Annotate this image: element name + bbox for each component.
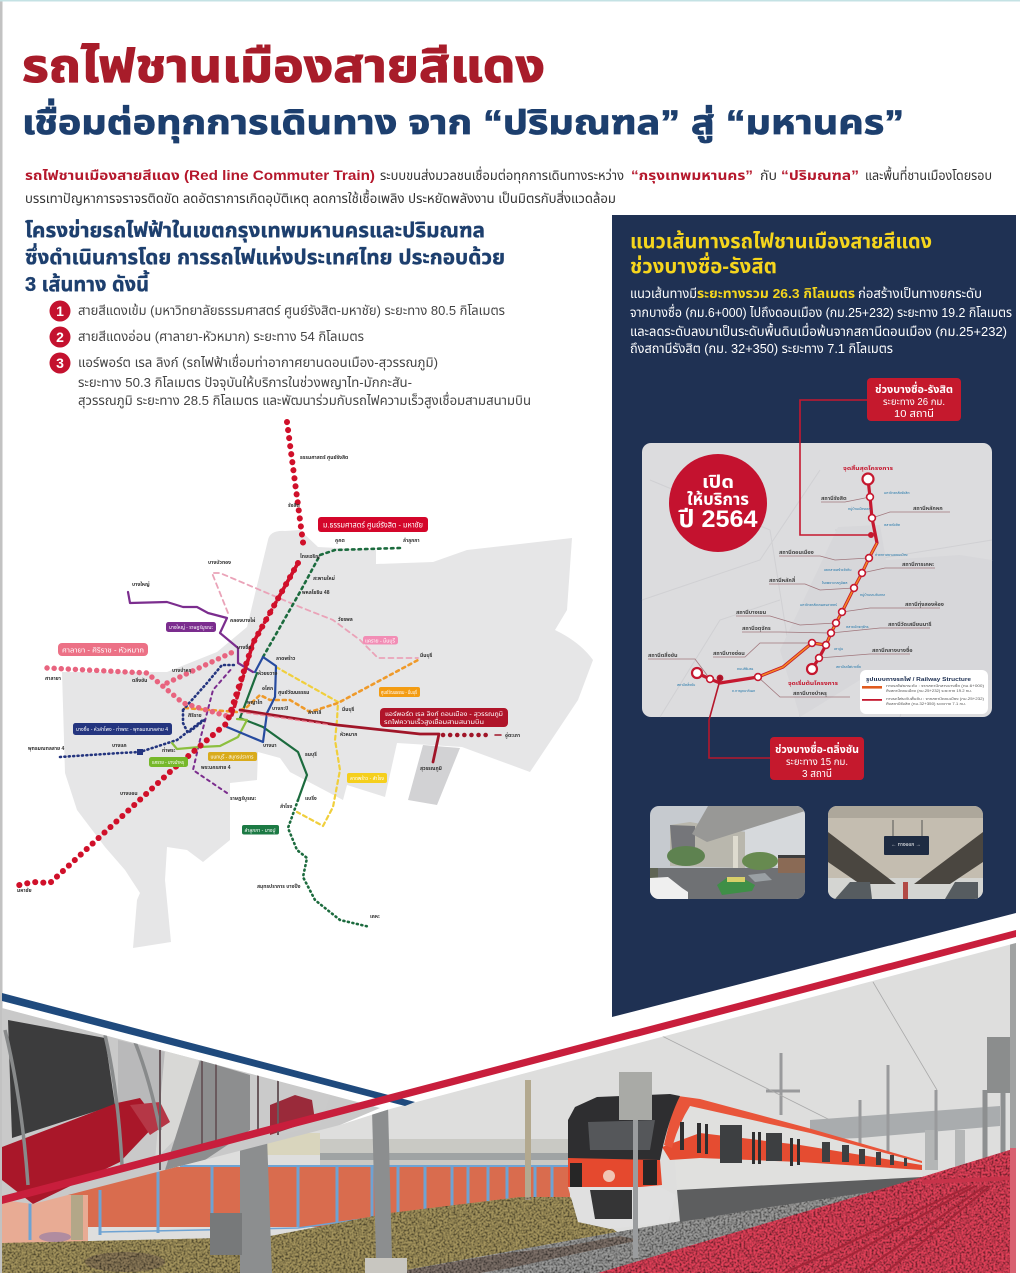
intro text: “กรุงเทพมหานคร” [631, 168, 753, 184]
station labels: พหลโยธิน 48 [302, 590, 330, 596]
station names: จุดสิ้นสุดโครงการ [843, 464, 893, 472]
station labels: มีนบุรี [420, 652, 433, 659]
station labels: บางนา [263, 743, 277, 749]
station names: สถานีวัดเสมียนนารี [888, 621, 932, 628]
station labels [17, 454, 520, 920]
panel heading [630, 231, 932, 278]
photo: elevated viaduct street view [650, 806, 805, 899]
route label: light green line [149, 757, 188, 767]
panel heading: ช่วงบางซื่อ-รังสิต [630, 252, 777, 278]
station labels: มีนบุรี [342, 706, 355, 713]
route label: dark green line [242, 825, 279, 834]
callout: Bang Sue to Rangsit: 10 สถานี [894, 408, 934, 420]
station labels: แบริ่ง [305, 794, 317, 802]
station labels: ลำสาลี [308, 709, 321, 716]
intro text: รถไฟชานเมืองสายสีแดง (Red line Commuter Train) [25, 168, 375, 183]
station labels: ธนบุรี [305, 751, 317, 758]
route label: purple line: บางใหญ่ - ราษฎร์บูรณะ [169, 624, 213, 631]
panel description: ถึงสถานีรังสิต (กม. 32+350) ระยะทาง 7.1 กิโลเมตร [630, 341, 893, 356]
station labels: วัชรพล [338, 616, 353, 623]
station labels: ราษฎร์บูรณะ [230, 796, 256, 802]
station labels: บางใหญ่ [132, 580, 150, 588]
station names: ตลาดรังสิต [884, 523, 900, 527]
intro text: บรรเทาปัญหาการจราจรติดขัด ลดอัตราการเกิดอุบัติเหตุ ลดการใช้เชื้อเพลิง ประหยัดพลังงาน เป็นมิตรกับสิ่งแวดล้อม [25, 189, 616, 207]
station names: ท่าอากาศยานดอนเมือง [875, 553, 908, 557]
numbered route list: สายสีแดงอ่อน (ศาลายา-หัวหมาก) ระยะทาง 54 กิโลเมตร [78, 329, 364, 344]
callout: Bang Sue to Rangsit [867, 378, 961, 421]
map base: Bangkok and vicinity [62, 530, 593, 948]
station names: สถานีหลักสี่ [769, 576, 796, 584]
station names: สถานีบางเขน [736, 609, 767, 616]
station labels: อู่ตะเภา [505, 731, 520, 739]
station labels: สุวรรณภูมิ [420, 766, 442, 772]
intro text: กับ [760, 168, 777, 183]
blue stripe [2, 993, 415, 1106]
station names: สถานีหลักหก [913, 505, 943, 512]
station labels: ศูนย์วัฒนธรรม [278, 689, 309, 696]
station names: สถานีบางซ่อน [713, 649, 745, 657]
trackside cabinet [987, 940, 1016, 1273]
route label: gold line: นนทบุรี - สมุทรปราการ [210, 754, 254, 760]
panel: red line route [612, 215, 1016, 1017]
legend: railway structure: ถึงสถานีดอนเมือง (กม.25+232) ระยะทาง 19.2 กม. [886, 689, 972, 693]
station leader lines [648, 497, 950, 697]
callout: Bang Sue to Taling Chan: 3 สถานี [802, 768, 832, 780]
numbered route list: 1 [56, 303, 64, 319]
dark green dotted line [263, 548, 400, 657]
callout: Bang Sue to Taling Chan: ระยะทาง 15 กม. [786, 757, 848, 768]
green line [240, 673, 307, 800]
panel description: ระยะทางรวม 26.3 กิโลเมตร [697, 286, 855, 301]
legend: railway structure [860, 670, 988, 714]
photo: platform ceiling with sign: ← ทางออก → [891, 842, 921, 848]
orange fence [0, 1165, 570, 1243]
legend: railway structure: ทางรถไฟระดับพื้นดิน : จากสถานีดอนเมือง (กม.25+232) [886, 696, 984, 701]
distant building [267, 1133, 570, 1167]
network heading [25, 220, 505, 296]
station names: สถานีการเคหะ [902, 561, 934, 568]
route label: pink line: ศาลายา - ศิริราช - หัวหมาก [62, 646, 144, 654]
station labels: บางแค [112, 743, 127, 749]
dark red dotted line [15, 422, 304, 886]
station names: ถ.กาญจนาภิเษก [732, 689, 755, 693]
stations [692, 474, 875, 682]
station labels: บางซื่อ [237, 643, 251, 651]
station labels: ไทยเจริญ [300, 554, 320, 560]
route label: dark green line: ลำลูกกา - บางปู [244, 827, 276, 834]
numbered route list: แอร์พอร์ต เรล ลิงก์ (รถไฟฟ้าเชื่อมท่าอากาศยานดอนเมือง-สุวรรณภูมิ) [78, 353, 438, 370]
panel description: ก่อสร้างเป็นทางยกระดับ [858, 286, 982, 301]
station names: โรงพยาบาลภูมิพล [822, 581, 847, 585]
callout: Bang Sue to Taling Chan [770, 737, 864, 780]
electrical box [210, 1213, 242, 1255]
station labels: หัวหมาก [340, 731, 357, 738]
route label: dark red line [318, 517, 428, 532]
station labels: ศิริราช [188, 713, 202, 719]
station names: สถานีบางบำหรุ [793, 690, 827, 697]
route label: navy line [73, 723, 172, 735]
numbered route list: สุวรรณภูมิ ระยะทาง 28.5 กิโลเมตร และพัฒนาร่วมกับรถไฟความเร็วสูงเชื่อมสามสนามบิน [78, 391, 531, 408]
light pink dashed line [212, 573, 418, 658]
station labels: บางกะปิ [272, 706, 288, 712]
station names: แยกลาดพร้าววังหิน [824, 568, 851, 572]
navy dotted line [60, 665, 237, 757]
bottom photo: train and site [0, 930, 1020, 1273]
station labels: รังสิต [288, 502, 300, 509]
orange dashed line [185, 660, 418, 712]
title: รถไฟชานเมืองสายสีแดง [22, 40, 545, 92]
station names [648, 464, 944, 697]
callout: Bang Sue to Taling Chan: ช่วงบางซื่อ-ตลิ่งชัน [775, 741, 859, 756]
route label: navy line: บางซื่อ - หัวลำโพง - ท่าพระ - พุทธมณฑลสาย 4 [76, 725, 168, 733]
station names: หมู่บ้านเมืองเอก [848, 507, 871, 511]
train front [568, 1094, 680, 1160]
station labels: คลองบางไผ่ [230, 616, 256, 624]
station names: สถานีจตุจักร [742, 625, 771, 632]
route label: gold line [208, 752, 257, 761]
panel description: แนวเส้นทางมี [630, 286, 697, 301]
intro text [25, 166, 992, 207]
panel description [630, 286, 1012, 356]
route label: light green line: แคราย - บางบำหรุ [152, 759, 184, 766]
wooden post [71, 1195, 83, 1240]
yellow dashed line [276, 667, 340, 826]
station labels: ห้วยขวาง [258, 670, 277, 677]
airport rail link line [240, 710, 439, 762]
network map [15, 422, 593, 948]
connector: Bang Sue to Rangsit [800, 400, 873, 537]
route label: airport rail link: แอร์พอร์ต เรล ลิงก์ ดอนเมือง - สุวรรณภูมิ [385, 710, 503, 719]
station labels: บางบัวทอง [208, 559, 231, 566]
station labels: บางบอน [120, 791, 138, 797]
intro text: “ปริมณฑล” [781, 168, 859, 183]
route label: purple line [166, 622, 216, 632]
numbered route list: ระยะทาง 50.3 กิโลเมตร ปัจจุบันให้บริการในช่วงพญาไท-มักกะสัน- [78, 375, 412, 390]
route label: airport rail link: รถไฟความเร็วสูงเชื่อมสามสนามบิน [384, 717, 484, 726]
station names: ตลาดนัดจตุจักร [846, 625, 869, 629]
network heading: 3 เส้นทาง ดังนี้ [25, 270, 150, 296]
station labels: บางบำหรุ [172, 667, 192, 674]
station names: มหาวิทยาลัยรังสิต [884, 491, 910, 495]
intro text: ระบบขนส่งมวลชนเชื่อมต่อทุกการเดินทางระหว่าง [380, 166, 624, 184]
title [22, 40, 904, 143]
station labels: มหาชัย [17, 887, 32, 894]
numbered route list: 3 [56, 355, 64, 371]
station labels: อโศก [262, 686, 273, 692]
route label: orange line: ศูนย์วัฒนธรรม - มีนบุรี [381, 689, 417, 696]
sign pole [619, 1072, 652, 1258]
station labels: ธรรมศาสตร์ ศูนย์รังสิต [300, 454, 348, 461]
connector: Bang Sue to Taling Chan [709, 675, 770, 758]
route label: orange line [379, 687, 420, 697]
legend: railway structure: รูปแบบทางรถไฟ / Railway Structure [866, 677, 971, 683]
ground texture [2, 1192, 873, 1273]
blue loop line [227, 657, 276, 742]
station names: ถนนสิรินธร [737, 667, 754, 671]
purple dashed line [193, 667, 233, 793]
photo: platform ceiling with sign [828, 806, 983, 899]
callout: Bang Sue to Rangsit: ระยะทาง 26 กม. [883, 397, 945, 408]
route label: airport rail link [380, 708, 508, 727]
callout: Bang Sue to Rangsit: ช่วงบางซื่อ-รังสิต [875, 381, 953, 396]
station names: สถานีตลิ่งชัน [648, 651, 678, 659]
network heading: โครงข่ายรถไฟฟ้าในเขตกรุงเทพมหานครและปริมณฑล [25, 220, 485, 242]
route label: yellow line [347, 773, 387, 783]
gravel and rail [407, 1191, 874, 1273]
intro text: และพื้นที่ชานเมืองโดยรอบ [865, 166, 992, 183]
station labels: ตลิ่งชัน [132, 676, 147, 684]
station labels: พญาไท [247, 700, 262, 706]
route map box [642, 443, 992, 717]
station names: มหาวิทยาลัยเกษตรศาสตร์ [800, 603, 837, 607]
gantry and viaduct [660, 982, 1003, 1170]
callout circle: opening 2564 [669, 454, 767, 552]
pink dotted line [47, 652, 233, 717]
purple line [128, 592, 253, 672]
station labels: คูคต [335, 538, 345, 544]
red stripe [2, 930, 1016, 1204]
panel heading: แนวเส้นทางรถไฟชานเมืองสายสีแดง [630, 231, 932, 253]
panel description: และลดระดับลงมาเป็นระดับพื้นดินเมื่อพ้นจากสถานีดอนเมือง (กม.25+232) [630, 322, 1007, 339]
station names: เตาปูน [834, 647, 843, 651]
station names: จุดเริ่มต้นโครงการ [788, 679, 838, 687]
station labels: พระนครสาย 4 [201, 765, 231, 771]
station names: สถานีรถไฟบางซื่อ [836, 664, 861, 669]
station labels: สะพานใหม่ [313, 574, 335, 582]
station names: สถานีกลางบางซื่อ [872, 646, 913, 654]
station labels: พุทธมณฑลสาย 4 [28, 746, 64, 752]
station labels: เคหะ [370, 914, 380, 920]
callout circle: opening 2564: ปี 2564 [678, 506, 758, 533]
red overlay on track [590, 1145, 1020, 1273]
callout circle: opening 2564: ให้บริการ [687, 490, 749, 509]
station names: สถานีรังสิต [821, 495, 847, 502]
photo: train interior [2, 1008, 380, 1204]
station names: สถานีตลิ่งชัน [677, 682, 695, 687]
concrete pillars [240, 1105, 407, 1273]
light green line [172, 719, 247, 749]
legend: railway structure: ถึงสถานีรังสิต (กม.32+350) ระยะทาง 7.1 กม. [886, 702, 966, 706]
train body [568, 1094, 922, 1229]
callout circle: opening 2564: เปิด [702, 472, 734, 492]
station labels: สำโรง [280, 803, 293, 810]
route label: yellow line: ลาดพร้าว - สำโรง [350, 775, 384, 782]
station labels: ท่าพระ [162, 746, 176, 754]
station names: สถานีทุ่งสองห้อง [905, 600, 944, 608]
route label: pink line [58, 643, 148, 656]
grass [0, 1197, 617, 1273]
title: เชื่อมต่อทุกการเดินทาง จาก “ปริมณฑล” สู่ “มหานคร” [22, 98, 904, 143]
station names: สถานีดอนเมือง [779, 549, 814, 556]
wooden pole behind train [525, 1080, 531, 1200]
route label: light pink line [363, 636, 398, 644]
map base: Samut Prakan block [408, 745, 460, 805]
numbered route list [50, 300, 531, 408]
legend: railway structure: ทางรถไฟยกระดับ : จากสถานีกลางบางซื่อ (กม.6+000) [886, 683, 984, 688]
route label: light pink line: แคราย - มีนบุรี [365, 638, 396, 644]
station labels: ลำลูกกา [403, 537, 420, 544]
station labels: ศาลายา [45, 676, 61, 682]
route label: dark red line: ม.ธรรมศาสตร์ ศูนย์รังสิต - มหาชัย [323, 520, 423, 530]
route line [697, 479, 877, 683]
station names: หมู่บ้านรามอินทรา [860, 593, 886, 597]
station labels: สมุทรปราการ บางปิ้ง [257, 882, 301, 890]
station labels: ลาดพร้าว [276, 655, 296, 662]
numbered route list: สายสีแดงเข้ม (มหาวิทยาลัยธรรมศาสตร์ ศูนย์รังสิต-มหาชัย) ระยะทาง 80.5 กิโลเมตร [78, 303, 505, 318]
network heading: ซึ่งดำเนินการโดย การรถไฟแห่งประเทศไทย ประกอบด้วย [25, 243, 505, 269]
numbered route list: 2 [56, 329, 64, 345]
sky [88, 944, 1014, 1266]
